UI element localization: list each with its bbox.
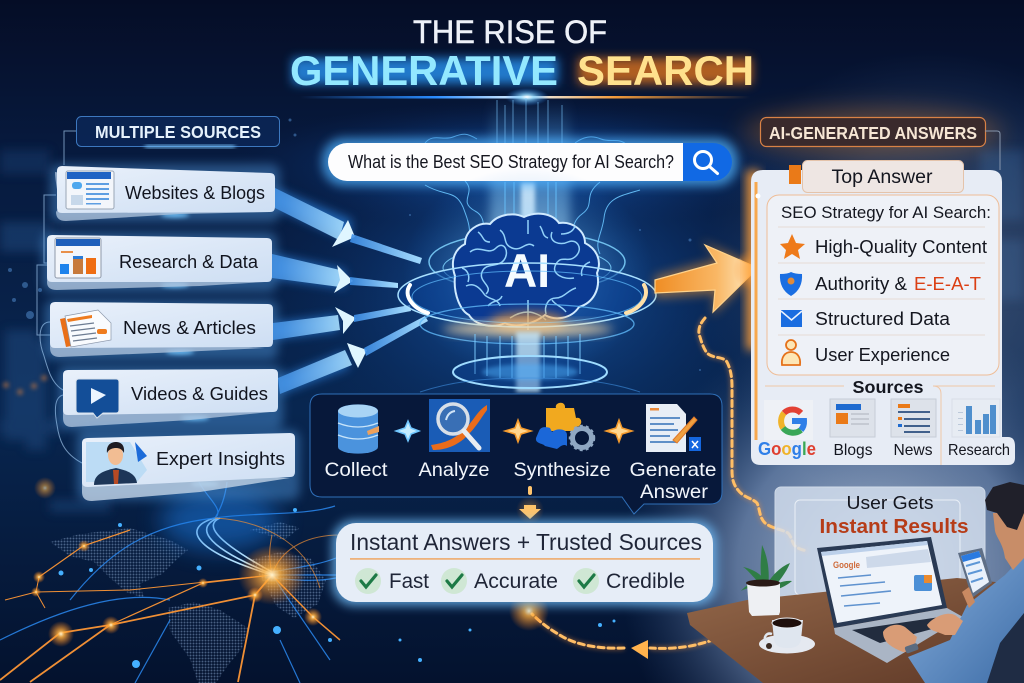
source: research [948,399,1010,459]
title [290,14,754,106]
panel: multiple sources [37,116,300,501]
arrow glow [272,188,352,394]
badge: fast [355,568,429,594]
source: news [891,399,936,459]
sources heading: Sources [852,377,924,397]
card: expert insights [77,430,300,501]
title line two [290,47,754,94]
coffee cup [759,618,815,654]
world map and network [0,477,616,683]
plant [741,545,792,616]
label: News & Articles [123,318,256,338]
tab: top answer: Top Answer [832,167,933,188]
step: analyze [418,399,490,481]
item: high-quality content [780,234,987,259]
glow [746,170,760,350]
icon: expert portrait [86,442,147,485]
icon: puzzle and gear [536,403,594,450]
title rule [300,96,750,98]
icon: bar chart page [55,238,101,278]
source: news: News [894,442,932,459]
icon: video player [76,379,119,418]
label: Synthesize [514,459,610,481]
answer card [751,170,1015,465]
step: generate answer [630,404,716,503]
source: blogs [830,399,875,459]
AI label: AI [504,244,550,297]
scene: user at desk [687,482,1024,683]
badge: credible [573,568,685,594]
segment: answer panel to user [699,318,808,551]
title line two: GENERATIVE [290,47,558,94]
title glow [292,58,752,84]
heading: multiple sources: MULTIPLE SOURCES [95,122,261,142]
brain shape [453,214,599,326]
laptop: Google [833,560,860,570]
arrow: research to AI [272,254,398,293]
label: Generate [630,459,716,481]
step: generate answer: Answer [640,481,709,503]
step: synthesize [514,403,610,481]
phone [958,548,992,598]
segment: desk to arrow [650,630,763,648]
icon: document and pen [646,404,701,452]
title line one: THE RISE OF [413,14,607,50]
laptop [817,537,963,663]
heading: multiple sources [76,116,280,148]
card: videos and guides [58,366,283,430]
item: user experience [782,340,950,365]
card: websites and blogs [50,164,280,222]
label: Videos & Guides [131,384,268,404]
step: collect [324,404,388,481]
AI brain [398,167,656,392]
title line two: SEARCH [577,47,754,94]
person [883,482,1024,683]
panel: AI-generated answers [742,108,1015,465]
arrow: websites to AI [275,188,422,264]
search question: What is the Best SEO Strategy for AI Search? [348,151,674,172]
light pillars under brain [475,334,580,378]
label: Expert Insights [156,449,285,469]
plus: blue [396,421,419,441]
icon: magnifier tile [429,399,490,452]
heading: AI-generated answers [742,108,1002,170]
card: research and data [42,232,277,292]
source: blogs: Blogs [834,442,872,459]
icon: database [338,404,379,454]
dashed result path [509,318,808,659]
glass panel: Instant Results [820,516,968,538]
source: research: Research [948,442,1010,459]
item: authority and E-E-A-T: E-E-A-T [914,274,981,294]
arrow: videos to AI [278,316,428,394]
panel: process [310,394,722,514]
glass panel [775,487,985,602]
card: news and articles [45,300,278,360]
label: Websites & Blogs [125,183,265,203]
badge: fast: Fast [389,570,429,593]
answer subtitle: SEO Strategy for AI Search: [781,203,991,222]
icon: newspaper [60,310,111,347]
output arrow [655,240,777,316]
hands [883,625,917,652]
result heading: Instant Answers + Trusted Sources [350,529,702,555]
plus: orange [606,420,632,442]
item: authority and E-E-A-T: Authority & [815,274,907,294]
source: google: Google [758,438,816,459]
icon: magnifier [694,152,718,174]
icon: web page [66,171,114,209]
arrow: news to AI [273,305,411,340]
item: user experience: User Experience [815,345,950,365]
item: high-quality content: High-Quality Content [815,237,987,257]
desk [687,578,1024,683]
badge: accurate: Accurate [474,570,558,593]
central column of light [425,98,640,257]
label: Analyze [418,459,490,481]
rings front [398,263,656,344]
label: Research & Data [119,252,259,272]
panel: result [332,520,717,606]
orange network [0,518,340,682]
arrow: process to result [516,486,544,524]
blue arcs to hub [197,518,272,575]
badge: credible: Credible [606,570,685,593]
badge: accurate [441,568,558,594]
plus: orange [505,420,531,442]
tab: top answer [789,160,964,192]
input arrows [272,188,428,394]
heading: AI-generated answers: AI-GENERATED ANSWERS [769,123,977,143]
search bar [322,138,738,186]
user gets text: User Gets [846,492,934,513]
label: Collect [324,459,388,481]
source: google [758,400,816,459]
card connector glows [161,212,219,486]
item: authority and E-E-A-T [780,272,981,296]
rings behind [429,232,625,292]
arrow head [631,640,648,659]
item: structured data: Structured Data [815,309,951,329]
segment: arrow to result [532,614,624,648]
